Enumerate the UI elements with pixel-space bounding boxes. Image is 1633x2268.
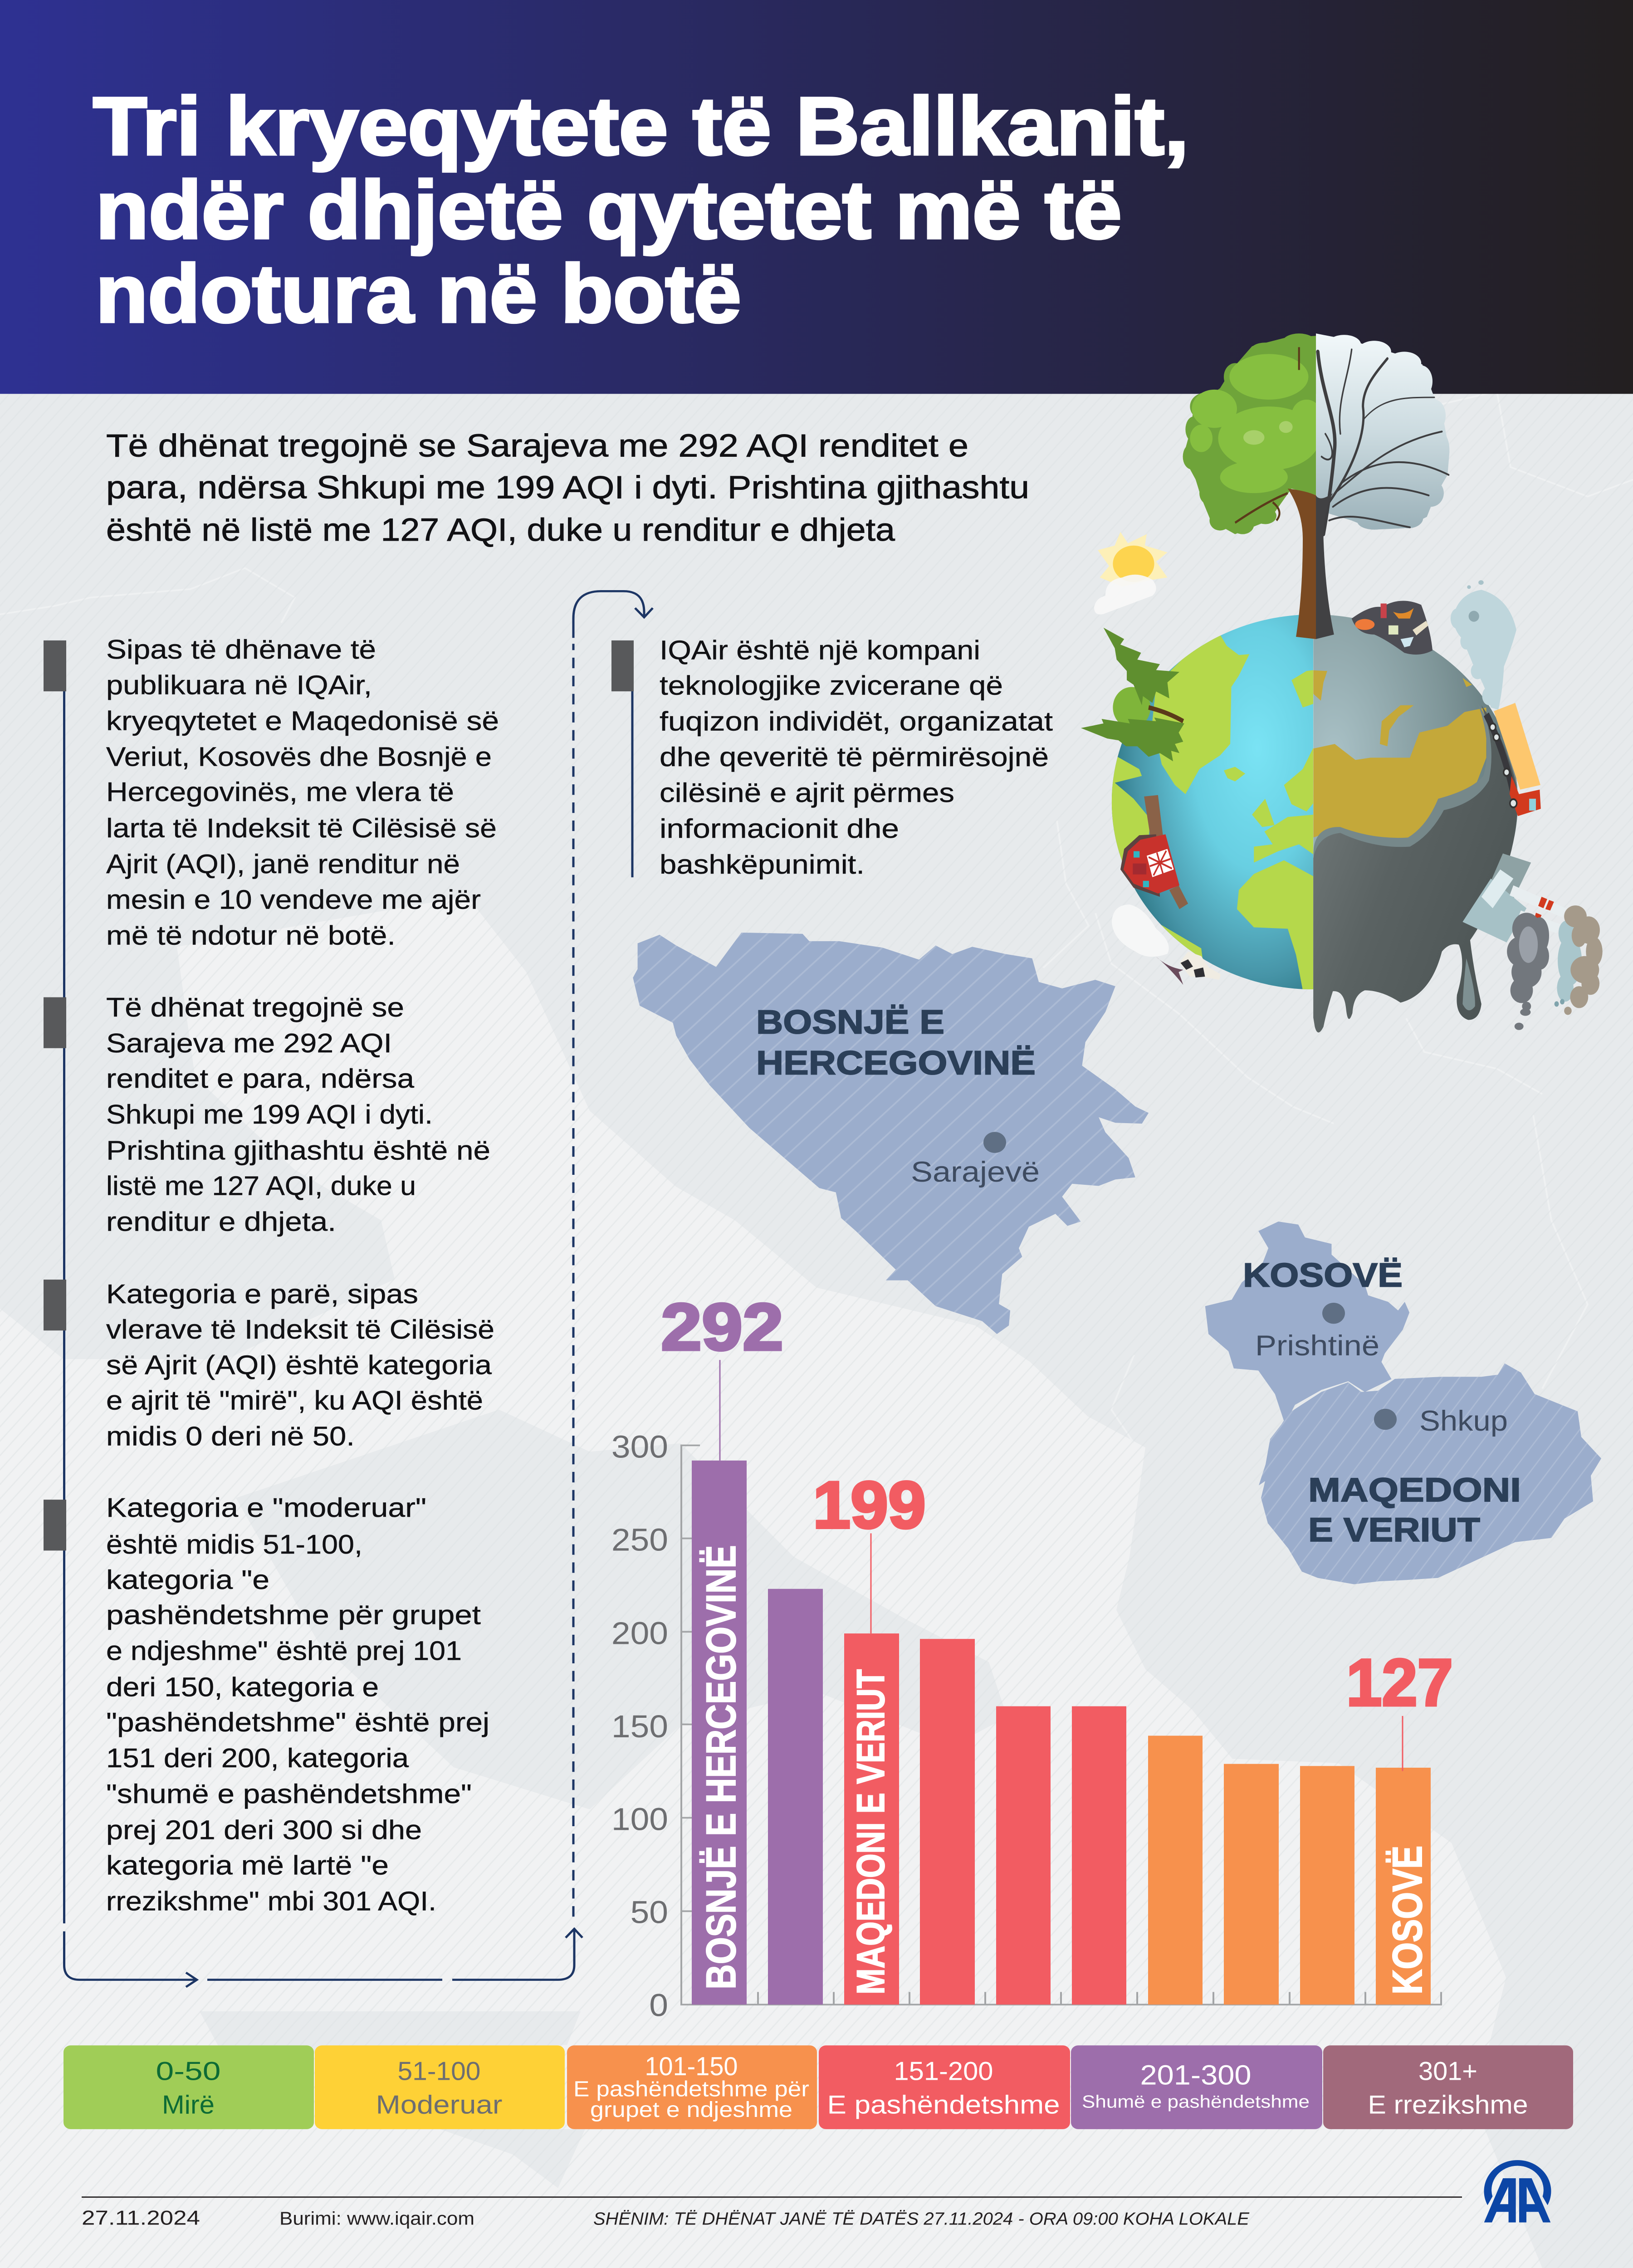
oil layer with drips — [1313, 705, 1517, 1032]
left text: paragraph 2: Të dhënat tregojnë se — [106, 992, 404, 1023]
city: Sarajevo — [911, 1132, 1040, 1188]
title: ndër dhjetë qytetet më të — [96, 164, 1122, 256]
left text: paragraph 2: Shkupi me 199 AQI i dyti. — [106, 1100, 433, 1129]
callout: 199: 199 — [813, 1468, 926, 1542]
bar label: Macedonia: MAQEDONI E VERIUT — [849, 1669, 893, 1994]
city: Skopje: Shkup — [1419, 1405, 1508, 1437]
right text: about IQAir: informacionit dhe — [660, 814, 899, 844]
left text: paragraph 4: Kategoria e "moderuar" — [106, 1493, 426, 1523]
left text: paragraph 1: publikuara në IQAir, — [106, 670, 372, 700]
left text: paragraph 3: midis 0 deri në 50. — [106, 1422, 355, 1452]
right text: about IQAir: bashkëpunimit. — [660, 850, 865, 880]
left text: paragraph 4: prej 201 deri 300 si dhe — [106, 1815, 422, 1845]
trash heap — [1352, 601, 1433, 655]
legend: good: 0-50 — [156, 2056, 220, 2086]
chart axes — [681, 1445, 1441, 2004]
left text: paragraph 4: "pashëndetshme" është prej — [106, 1707, 489, 1738]
left text: paragraph 1: larta të Indeksit të Cilësisë së — [106, 813, 497, 843]
y axis labels: 150 — [611, 1710, 668, 1745]
oil drop highlight — [1462, 958, 1475, 1010]
legend: moderate: Moderuar — [376, 2090, 503, 2119]
legend: very unhealthy — [1071, 2045, 1322, 2129]
subtitle: Të dhënat tregojnë se Sarajeva me 292 AQI renditet e — [106, 428, 968, 464]
left text: paragraph 4: kategoria "e — [106, 1565, 269, 1595]
legend: moderate: 51-100 — [397, 2056, 480, 2086]
legend: unhealthy — [819, 2045, 1070, 2129]
title: ndotura në botë — [96, 248, 741, 339]
city: Pristina — [1255, 1303, 1379, 1361]
subtitle — [106, 428, 1029, 547]
text marker 2 — [44, 997, 66, 1048]
city: Skopje — [1374, 1405, 1508, 1437]
legend: unhealthy for sensitive groups: E pashëndetshme për — [573, 2077, 809, 2101]
left text: paragraph 3: Kategoria e parë, sipas — [106, 1279, 418, 1309]
legend: unhealthy: 151-200 — [894, 2056, 993, 2086]
text marker 4 — [44, 1500, 66, 1550]
legend — [64, 2045, 1573, 2129]
globe polluted half — [1313, 615, 1518, 989]
y axis labels: 300 — [611, 1430, 668, 1465]
label: Macedonia name: E VERIUT — [1308, 1511, 1480, 1549]
globe healthy half — [1107, 612, 1314, 990]
right text: about IQAir: cilësinë e ajrit përmes — [660, 778, 954, 808]
right text: about IQAir — [660, 635, 1053, 880]
callout: 292: 292 — [661, 1290, 783, 1364]
callout: 127: 127 — [1346, 1646, 1453, 1720]
left text: paragraph 4: kategoria më lartë "e — [106, 1851, 389, 1881]
bars — [692, 1461, 1431, 2004]
note: SHËNIM: TË DHËNAT JANË TË DATËS 27.11.2024 - ORA 09:00 KOHA LOKALE — [593, 2209, 1250, 2229]
y axis labels: 200 — [611, 1616, 668, 1651]
left text: paragraph 4: deri 150, kategoria e — [106, 1672, 379, 1702]
tree healthy crown — [1183, 333, 1321, 534]
legend: very unhealthy: Shumë e pashëndetshme — [1082, 2092, 1310, 2112]
text marker right — [611, 640, 634, 691]
left text: paragraph 4 — [106, 1493, 489, 1916]
y axis labels: 50 — [631, 1895, 668, 1930]
subtitle: është në listë me 127 AQI, duke u renditur e dhjeta — [106, 512, 895, 547]
left text: paragraph 2 — [106, 992, 490, 1237]
sun and cloud — [1094, 532, 1168, 615]
left text: paragraph 3: e ajrit të "mirë", ku AQI është — [106, 1386, 483, 1416]
left text: paragraph 4: rrezikshme" mbi 301 AQI. — [106, 1887, 436, 1916]
footer rule — [82, 2196, 1462, 2198]
left text: paragraph 4: 151 deri 200, kategoria — [106, 1743, 409, 1774]
left text: paragraph 1: më të ndotur në botë. — [106, 921, 396, 951]
legend: hazardous: E rrezikshme — [1368, 2090, 1528, 2119]
legend: unhealthy: E pashëndetshme — [827, 2090, 1060, 2119]
left text: paragraph 1: kryeqytetet e Maqedonisë së — [106, 706, 499, 736]
city: Pristina: Prishtinë — [1255, 1330, 1379, 1361]
legend: unhealthy for sensitive groups — [567, 2045, 817, 2129]
left text: paragraph 2: renditet e para, ndërsa — [106, 1064, 415, 1094]
label: Bosnia name: HERCEGOVINË — [756, 1044, 1036, 1082]
legend: hazardous — [1323, 2045, 1573, 2129]
map: North Macedonia — [1259, 1364, 1601, 1584]
left text: paragraph 1: Hercegovinës, me vlera të — [106, 777, 454, 807]
left text: paragraph 2: listë me 127 AQI, duke u — [106, 1171, 416, 1201]
label: Kosovo name: KOSOVË — [1243, 1256, 1403, 1294]
blue-grey smoke — [1555, 920, 1582, 1007]
factory — [1462, 854, 1566, 943]
left text: paragraph 3 — [106, 1279, 494, 1452]
legend: good: Mirë — [162, 2090, 215, 2119]
left text: paragraph 4: pashëndetshme për grupet — [106, 1600, 481, 1630]
label: Macedonia name: MAQEDONI — [1308, 1471, 1521, 1509]
bar chart — [611, 1290, 1453, 2023]
right text: about IQAir: IQAir është një kompani — [660, 635, 980, 665]
right text: about IQAir: dhe qeveritë të përmirësojnë — [660, 742, 1049, 772]
left text: paragraph 2: Prishtina gjithashtu është në — [106, 1136, 490, 1166]
left text: paragraph 2: renditur e dhjeta. — [106, 1207, 336, 1237]
legend: hazardous: 301+ — [1418, 2056, 1477, 2086]
title — [93, 80, 1189, 339]
city: Sarajevo: Sarajevë — [911, 1156, 1040, 1188]
text marker 1 — [44, 640, 66, 691]
legend: very unhealthy: 201-300 — [1140, 2060, 1252, 2091]
bar label: Bosnia: BOSNJË E HERCEGOVINË — [698, 1545, 744, 1989]
y axis labels: 0 — [649, 1988, 668, 2023]
white cloud lower left — [1112, 904, 1169, 957]
legend: unhealthy for sensitive groups: 101-150 — [645, 2052, 738, 2081]
date: 27.11.2024 — [82, 2206, 200, 2229]
truck — [1486, 703, 1541, 816]
source: Burimi: www.iqair.com — [279, 2208, 474, 2229]
subtitle: para, ndërsa Shkupi me 199 AQI i dyti. Prishtina gjithashtu — [106, 469, 1029, 505]
gray smoke — [1507, 913, 1549, 1030]
left text: paragraph 3: vlerave të Indeksit të Cilësisë — [106, 1315, 494, 1344]
tree trunk — [1288, 489, 1334, 639]
brown smoke — [1564, 905, 1603, 1015]
icon: AA logo — [1484, 2160, 1551, 2222]
bar label: Kosovo: KOSOVË — [1384, 1846, 1431, 1994]
left text: paragraph 3: së Ajrit (AQI) është kategoria — [106, 1350, 492, 1380]
header band — [0, 0, 1633, 394]
left text: paragraph 4: e ndjeshme" është prej 101 — [106, 1636, 462, 1666]
right text: about IQAir: teknologjike zvicerane që — [660, 671, 1003, 701]
left text: paragraph 1: Ajrit (AQI), janë renditur në — [106, 849, 460, 879]
timeline connector — [64, 591, 653, 1987]
pine trees — [1081, 628, 1184, 761]
text marker 3 — [44, 1280, 66, 1330]
label: Bosnia name — [756, 1003, 1036, 1082]
tree bare crown — [1316, 333, 1449, 534]
left text: paragraph 4: është midis 51-100, — [106, 1530, 362, 1559]
callout: 292 — [661, 1290, 783, 1461]
label: Macedonia name — [1308, 1471, 1521, 1549]
title: Tri kryeqytete të Ballkanit, — [93, 80, 1189, 172]
map: Kosovo — [1205, 1222, 1409, 1424]
legend: good — [64, 2045, 314, 2129]
label: Bosnia name: BOSNJË E — [756, 1003, 944, 1041]
y axis labels — [611, 1430, 668, 2023]
barn — [1120, 795, 1188, 909]
left text: paragraph 4: "shumë e pashëndetshme" — [106, 1779, 472, 1809]
y axis labels: 250 — [611, 1523, 668, 1558]
legend: moderate — [315, 2045, 565, 2129]
left text: paragraph 1: Veriut, Kosovës dhe Bosnjë e — [106, 742, 492, 772]
left text: paragraph 1 — [106, 635, 499, 951]
y axis labels: 100 — [611, 1802, 668, 1837]
left text: paragraph 1: mesin e 10 vendeve me ajër — [106, 885, 481, 915]
cow — [1155, 952, 1221, 985]
pale smoke — [1451, 580, 1516, 710]
callout: 199 — [813, 1468, 926, 1633]
callout: 127 — [1346, 1646, 1453, 1771]
legend: unhealthy for sensitive groups: grupet e ndjeshme — [590, 2097, 792, 2122]
map: Bosnia and Herzegovina — [633, 933, 1149, 1334]
right text: about IQAir: fuqizon individët, organizatat — [660, 706, 1053, 737]
left text: paragraph 1: Sipas të dhënave të — [106, 635, 376, 665]
illustration: globe half healthy half polluted — [1081, 333, 1603, 1032]
left text: paragraph 2: Sarajeva me 292 AQI — [106, 1028, 392, 1059]
